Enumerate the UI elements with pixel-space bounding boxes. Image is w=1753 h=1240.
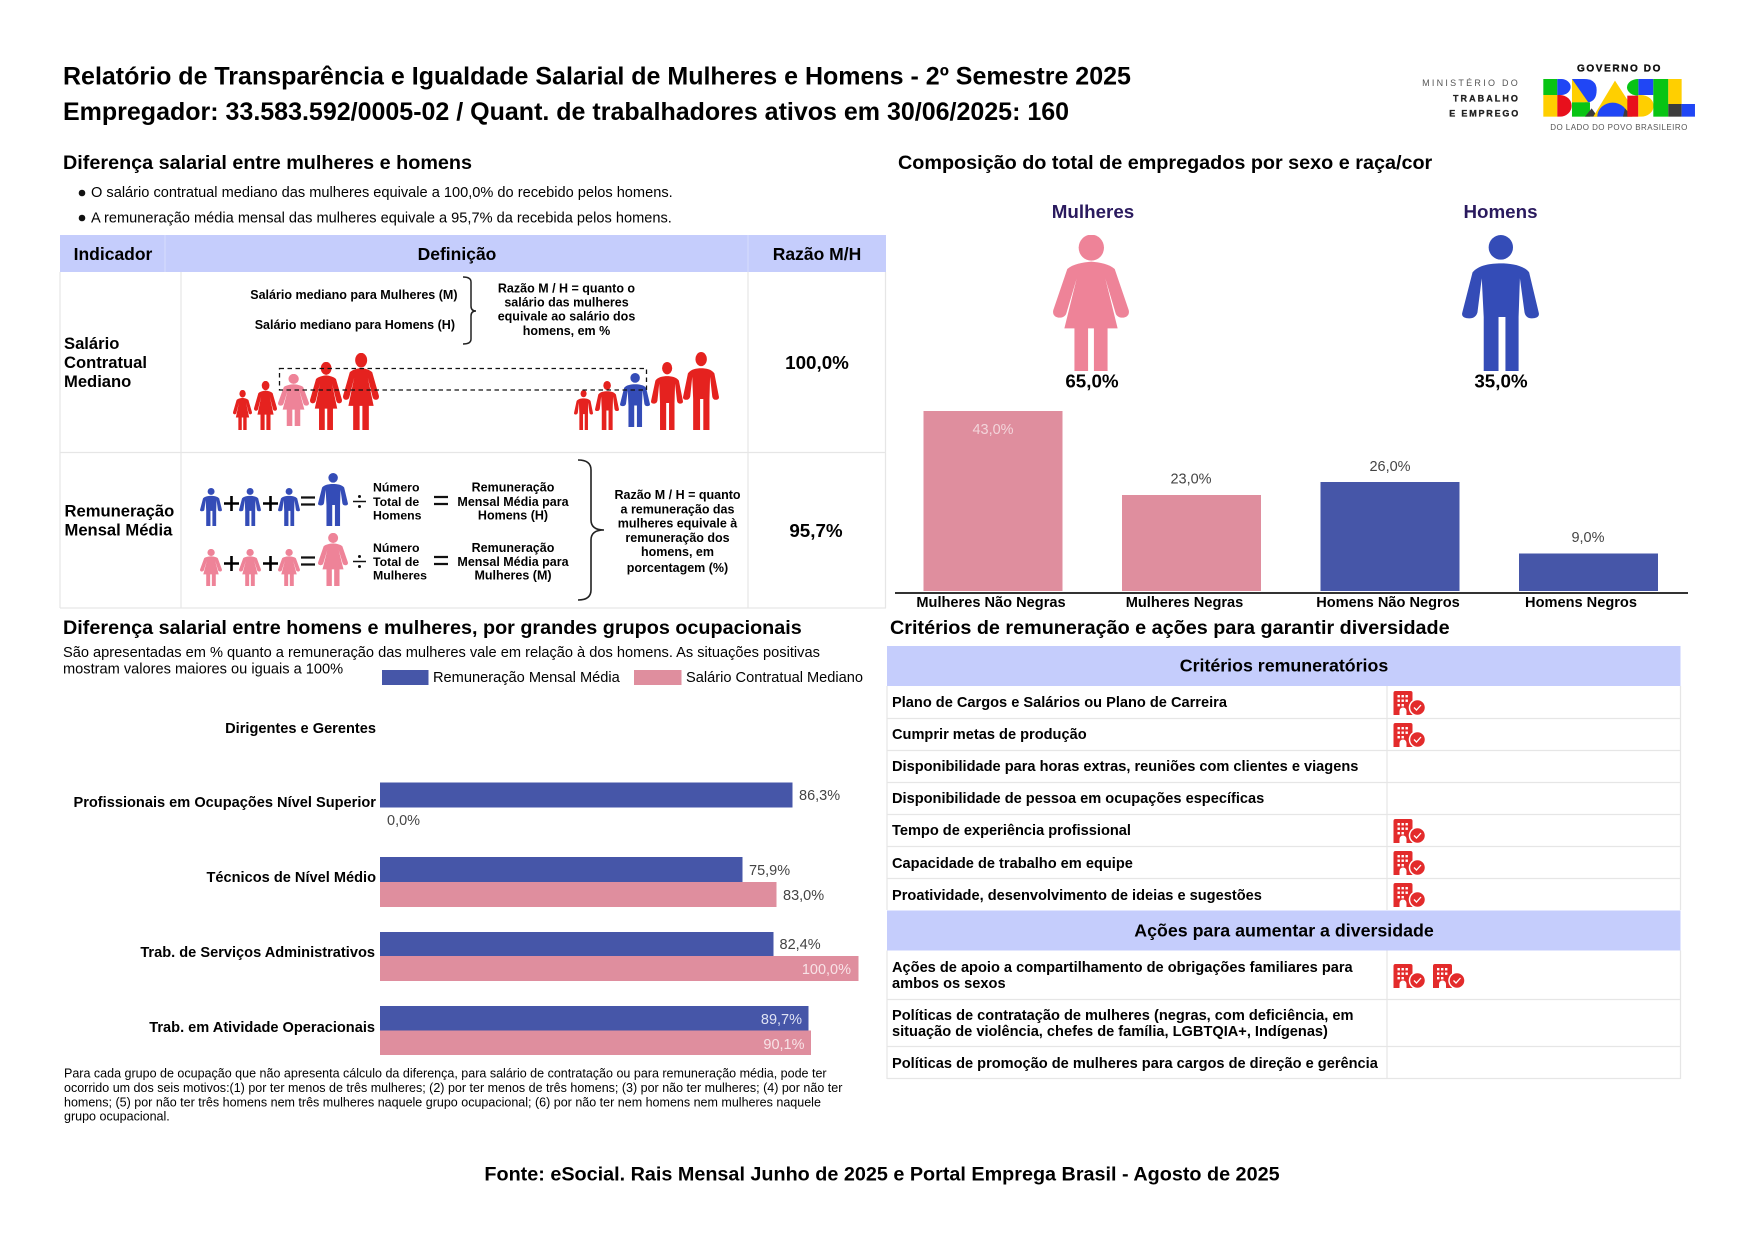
bar chart: composição por sexo e raça: Mulheres Não Negras (916, 595, 1066, 611)
bullet list: O salário contratual mediano das mulheres equivale a 100,0% do recebido pelos homens. (91, 185, 673, 201)
footnote: Para cada grupo de ocupação que não apresenta cálculo da diferença, para salário de contratação ou para remuneração média, pode ter (64, 1066, 827, 1080)
footnote (64, 1066, 842, 1124)
row: salário contratual mediano: Contratual (64, 353, 147, 372)
action icons (1394, 964, 1465, 988)
table header (60, 235, 886, 272)
row: salário contratual mediano (64, 277, 849, 430)
criteria icons (1394, 691, 1426, 908)
value labels: 100,0% (802, 962, 851, 978)
bullet list (79, 185, 673, 226)
bar chart: composição por sexo e raça: 23,0% (1170, 472, 1212, 488)
logo: Governo do Brasil: DO LADO DO POVO BRASILEIRO (1550, 123, 1688, 132)
chart description (63, 645, 820, 678)
row: salário contratual mediano: Razão M / H = quanto o (498, 282, 635, 296)
formula men: Homens (373, 508, 422, 522)
chart legend (382, 670, 863, 686)
action rows: Ações de apoio a compartilhamento de obrigações familiares para (892, 960, 1354, 976)
formula women: Mulheres (373, 568, 427, 582)
criteria rows (892, 695, 1358, 904)
criteria rows: Tempo de experiência profissional (892, 823, 1131, 839)
table header: Definição (418, 244, 496, 264)
criteria rows: Disponibilidade de pessoa em ocupações específicas (892, 791, 1264, 807)
bar chart: composição por sexo e raça: Homens Não Negros (1316, 595, 1460, 611)
chart description: São apresentadas em % quanto a remuneração das mulheres vale em relação à dos homens. As situações positivas (63, 645, 820, 661)
logo: Ministério do Trabalho e Emprego: E EMPREGO (1449, 108, 1520, 118)
header: critérios remuneratórios: Critérios remuneratórios (1180, 656, 1388, 676)
title (63, 62, 1131, 126)
women figures (233, 353, 379, 430)
logo: Governo do Brasil (1543, 64, 1695, 132)
heading: critérios: Critérios de remuneração e ações para garantir diversidade (890, 617, 1450, 639)
panel: mulheres (1052, 201, 1134, 392)
bar chart: composição por sexo e raça: Mulheres Negras (1126, 595, 1243, 611)
action rows: situação de violência, chefes de família, LGBTQIA+, Indígenas) (892, 1024, 1328, 1040)
criteria rows: Plano de Cargos e Salários ou Plano de Carreira (892, 695, 1228, 711)
criteria rows: Disponibilidade para horas extras, reuniões com clientes e viagens (892, 759, 1358, 775)
panel: indicator table (60, 235, 886, 608)
value labels: 83,0% (783, 888, 824, 904)
formula women: Mensal Média para (457, 555, 570, 569)
source: Fonte: eSocial. Rais Mensal Junho de 2025 e Portal Emprega Brasil - Agosto de 2025 (484, 1164, 1280, 1186)
category labels: Técnicos de Nível Médio (206, 870, 376, 886)
formula men: Total de (373, 495, 419, 509)
row: remuneração mensal média: Razão M / H = quanto (614, 488, 741, 502)
header: critérios remuneratórios (887, 646, 1680, 686)
formula men (200, 473, 570, 526)
value labels: 0,0% (387, 813, 420, 829)
formula men: Remuneração (472, 480, 555, 494)
panel: homens: 35,0% (1474, 370, 1528, 392)
category labels (73, 721, 376, 1036)
bar chart: composição por sexo e raça: Homens Negros (1525, 595, 1637, 611)
panel: mulheres: Mulheres (1052, 201, 1134, 222)
category labels: Dirigentes e Gerentes (225, 721, 376, 737)
row: remuneração mensal média: remuneração dos (625, 531, 730, 545)
formula women: Mulheres (M) (474, 568, 552, 582)
action rows: Políticas de promoção de mulheres para cargos de direção e gerência (892, 1056, 1379, 1072)
logo: Ministério do Trabalho e Emprego: TRABALHO (1453, 94, 1520, 104)
row: remuneração mensal média (64, 460, 843, 600)
heading: diferença por grupos ocupacionais: Diferença salarial entre homens e mulheres, por grandes grupos ocupacionais (63, 617, 802, 639)
row: salário contratual mediano: Mediano (64, 372, 131, 391)
row: salário contratual mediano: homens, em % (523, 324, 610, 338)
chart legend: Salário Contratual Mediano (686, 670, 863, 686)
panel: homens: Homens (1463, 201, 1538, 222)
bar chart: composição por sexo e raça: 9,0% (1571, 530, 1605, 546)
value labels: 75,9% (749, 863, 790, 879)
action rows: Políticas de contratação de mulheres (negras, com deficiência, em (892, 1008, 1354, 1024)
row: remuneração mensal média: 95,7% (789, 520, 843, 541)
panel: critérios table (887, 646, 1680, 1079)
row: remuneração mensal média: a remuneração das (621, 502, 735, 516)
category labels: Profissionais em Ocupações Nível Superior (73, 795, 376, 811)
row: remuneração mensal média: Remuneração (64, 502, 174, 520)
footnote: homens; (5) por não ter três homens nem três mulheres naquele grupo ocupacional; (6) por não ter nem homens nem mulheres naquele (64, 1096, 821, 1110)
action rows (892, 960, 1379, 1072)
logo: Ministério do Trabalho e Emprego (1422, 78, 1520, 118)
logo: Governo do Brasil: GOVERNO DO (1577, 64, 1662, 74)
chart description: mostram valores maiores ou iguais a 100% (63, 662, 343, 678)
heading: diferença salarial: Diferença salarial entre mulheres e homens (63, 152, 472, 174)
logo: Ministério do Trabalho e Emprego: MINISTÉRIO DO (1422, 78, 1520, 88)
bar chart: composição por sexo e raça (895, 411, 1688, 611)
formula women: Total de (373, 555, 419, 569)
panel: mulheres: 65,0% (1065, 370, 1119, 392)
action rows: ambos os sexos (892, 976, 1006, 992)
bar chart: composição por sexo e raça: 26,0% (1369, 459, 1411, 475)
men figures (574, 352, 719, 430)
value labels: 90,1% (763, 1037, 805, 1053)
criteria rows: Capacidade de trabalho em equipe (892, 856, 1133, 872)
footnote: ocorrido um dos seis motivos:(1) por ter menos de três mulheres; (2) por ter menos de três homens; (3) por não ter mulheres; (4) por não ter (64, 1081, 842, 1095)
formula men: Número (373, 480, 420, 494)
formula women (200, 533, 570, 586)
bullet list: A remuneração média mensal das mulheres equivale a 95,7% da recebida pelos homens. (91, 210, 672, 226)
footnote: grupo ocupacional. (64, 1110, 170, 1124)
row: salário contratual mediano: Salário mediano para Homens (H) (255, 318, 455, 332)
category labels: Trab. em Atividade Operacionais (149, 1020, 375, 1036)
title: Empregador: 33.583.592/0005-02 / Quant. de trabalhadores ativos em 30/06/2025: 160 (63, 98, 1069, 126)
formula men: Mensal Média para (457, 495, 570, 509)
value labels: 82,4% (780, 937, 821, 953)
row: salário contratual mediano: equivale ao salário dos (498, 310, 635, 324)
value labels: 86,3% (799, 788, 840, 804)
bar chart: composição por sexo e raça: 43,0% (972, 422, 1014, 438)
criteria rows: Cumprir metas de produção (892, 727, 1087, 743)
row: remuneração mensal média: mulheres equivale à (618, 516, 737, 530)
row: salário contratual mediano: salário das mulheres (504, 296, 629, 310)
row: remuneração mensal média: porcentagem (%) (627, 561, 728, 575)
value labels (387, 788, 851, 1053)
row: remuneração mensal média: homens, em (641, 545, 714, 559)
heading: composição: Composição do total de empregados por sexo e raça/cor (898, 152, 1433, 174)
header: ações: Ações para aumentar a diversidade (1134, 920, 1434, 940)
panel: homens (1462, 201, 1539, 392)
criteria rows: Proatividade, desenvolvimento de ideias e sugestões (892, 888, 1262, 904)
formula women: Remuneração (472, 541, 555, 555)
row: salário contratual mediano: Salário (64, 334, 119, 353)
header: ações (887, 910, 1680, 950)
row: salário contratual mediano: Salário mediano para Mulheres (M) (250, 288, 458, 302)
formula men: Homens (H) (478, 508, 548, 522)
value labels: 89,7% (761, 1012, 802, 1028)
category labels: Trab. de Serviços Administrativos (140, 945, 375, 961)
row: remuneração mensal média: Mensal Média (64, 520, 173, 540)
bars (380, 782, 858, 1055)
table header: Razão M/H (773, 244, 861, 264)
formula women: Número (373, 541, 420, 555)
title: Relatório de Transparência e Igualdade Salarial de Mulheres e Homens - 2º Semestre 2025 (63, 62, 1131, 90)
table header: Indicador (74, 244, 153, 264)
chart legend: Remuneração Mensal Média (433, 670, 621, 686)
bar chart: grupos ocupacionais (73, 721, 858, 1055)
row: salário contratual mediano: 100,0% (785, 352, 849, 373)
